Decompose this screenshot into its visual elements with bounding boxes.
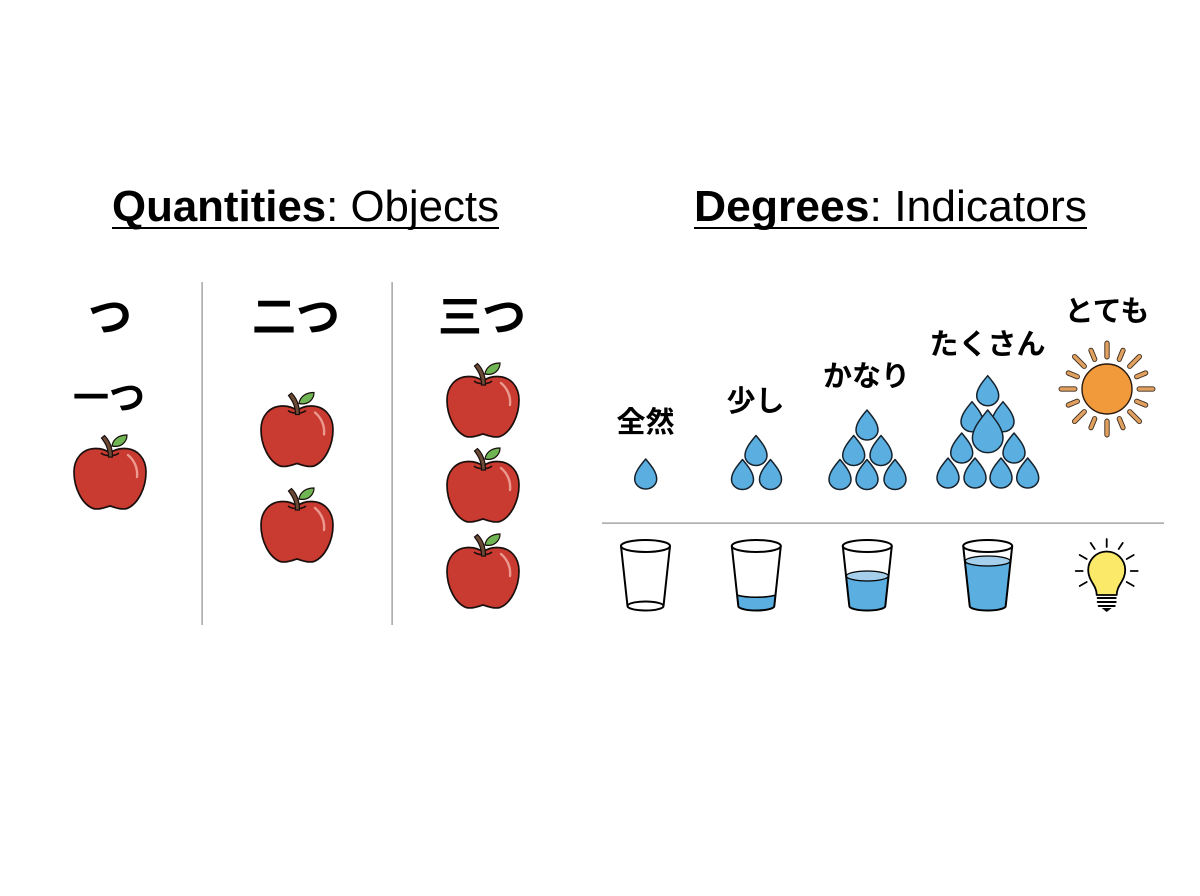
column: three apples [438,293,526,608]
icon: three drops [732,436,782,490]
column: one apple [73,293,146,509]
label: kanari: かなり [823,361,910,393]
icon: sun [1059,341,1155,437]
label: zenzen: 全然 [616,406,675,439]
label: tsu: つ [88,293,132,342]
apples [447,363,519,608]
icon: many drops [937,376,1039,488]
icon: six drops [829,410,906,490]
label: mittsu: 三つ [438,293,526,342]
icon: one drop [635,459,657,489]
icon: light bulb [1076,539,1138,612]
label: takusan: たくさん [929,329,1046,361]
title: Degrees: Indicators: Degrees: Indicators [694,182,1087,231]
apples [261,392,333,562]
label: totemo: とても [1065,296,1149,328]
label: hitotsu: 一つ [73,377,145,418]
label: futatsu: 二つ [252,293,340,342]
icon: glass nearly full [963,540,1012,610]
apple [74,435,146,509]
label: sukoshi: 少し [726,385,785,418]
icon: glass half full [843,540,892,610]
icon: empty glass [621,540,670,610]
title: Quantities: Objects: Quantities: Objects [112,182,499,231]
icon: glass with a little water [732,540,781,610]
column: two apples [252,293,340,562]
